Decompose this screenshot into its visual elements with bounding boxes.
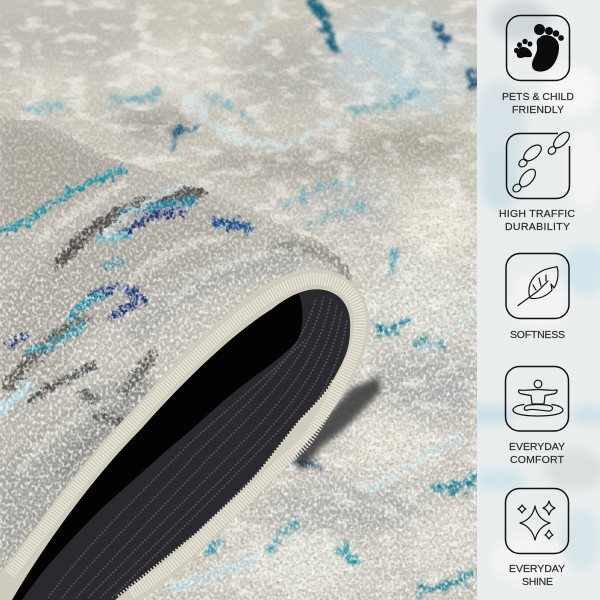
rug backing <box>5 279 360 600</box>
label: SOFTNESS <box>510 329 565 341</box>
feature: pets and child friendly <box>502 16 574 116</box>
icon: feather <box>506 254 569 318</box>
panel mottled texture <box>466 0 600 585</box>
icon: footprints <box>506 129 572 198</box>
label line two: DURABILITY <box>505 221 570 233</box>
label line two: FRIENDLY <box>512 104 564 116</box>
label: HIGH TRAFFIC <box>499 208 575 220</box>
side panel background <box>466 0 600 600</box>
floor mottling, grey clusters <box>130 32 468 596</box>
feature: high traffic durability <box>499 129 575 233</box>
pile texture <box>0 0 477 600</box>
floor rug base <box>0 0 477 600</box>
icon: meditating figure <box>506 366 568 431</box>
label: EVERYDAY <box>509 563 565 575</box>
feature: everyday shine <box>506 488 568 588</box>
label: EVERYDAY <box>509 441 565 453</box>
label line two: SHINE <box>522 576 553 588</box>
floor rug pattern blotches <box>25 0 475 590</box>
pile highlight texture <box>0 0 477 600</box>
icon: sparkles <box>506 488 568 554</box>
pile colour bands <box>0 125 355 570</box>
feature: softness <box>506 254 569 341</box>
rolled rug pile surface <box>0 118 355 600</box>
black interior of roll <box>5 291 302 600</box>
label: PETS & CHILD <box>502 91 574 103</box>
label line two: COMFORT <box>510 454 565 466</box>
cream binding edge <box>0 269 370 600</box>
icon: paw and foot <box>506 16 570 80</box>
feature: everyday comfort <box>506 366 568 466</box>
shadow under roll <box>294 376 380 472</box>
floor mottling, cream clusters <box>0 0 477 600</box>
backing weave ribs <box>48 295 347 598</box>
